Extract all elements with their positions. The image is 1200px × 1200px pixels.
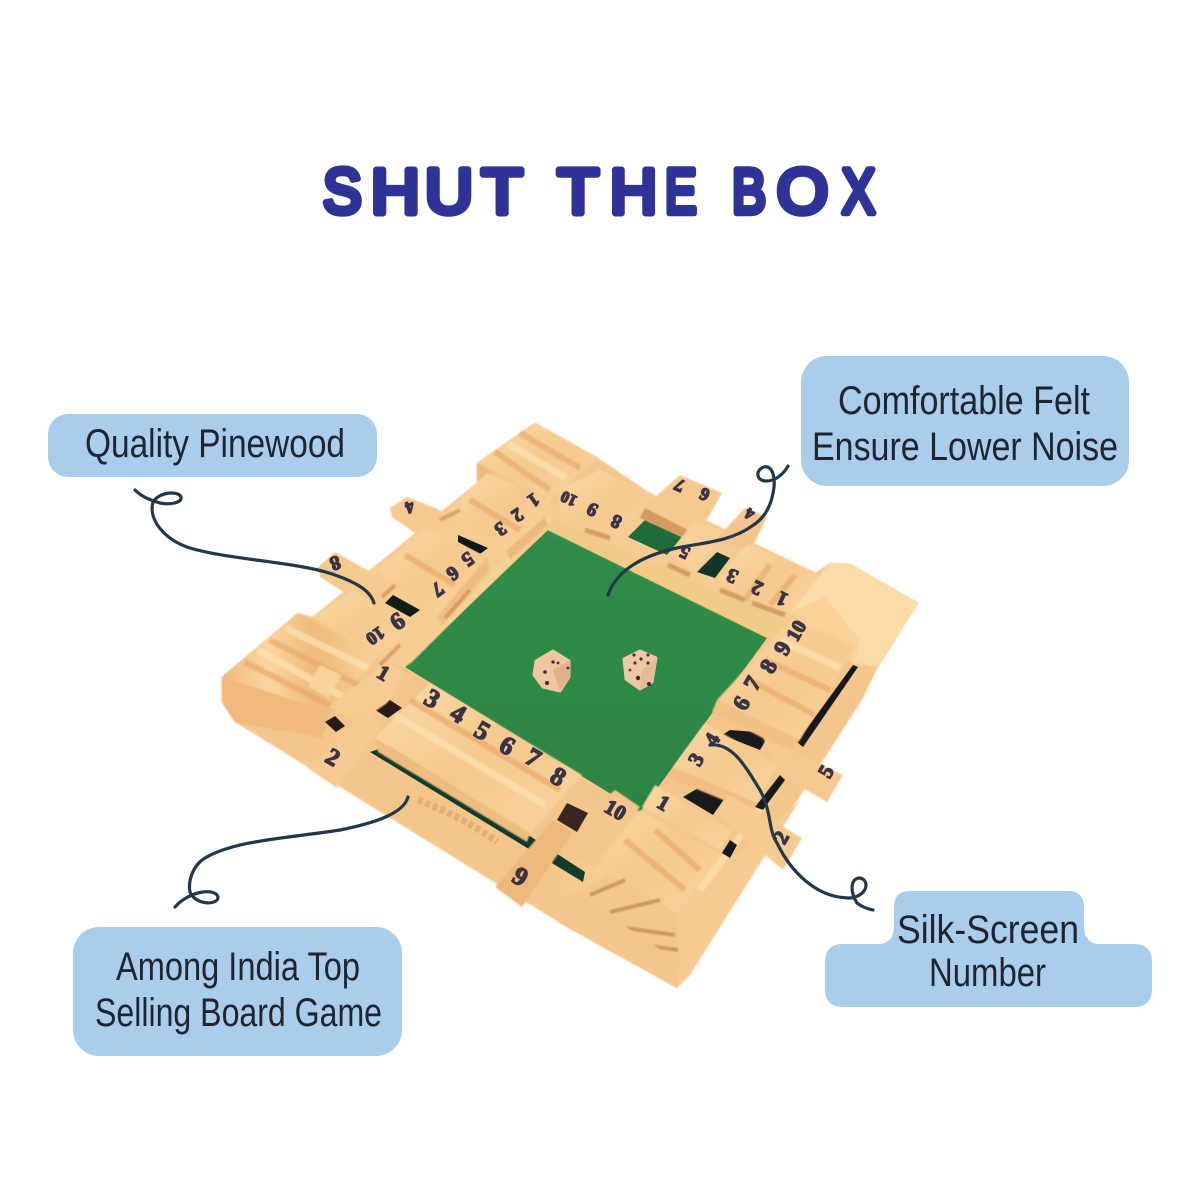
title: O [777,157,828,227]
silk-screen numbers: 2 [507,503,527,526]
silk-screen numbers: 9 [507,861,533,892]
silk-screen numbers: 4 [743,504,757,522]
silk-screen numbers: 1 [773,586,792,611]
title: T [482,157,523,227]
shut the box wooden board [222,423,918,988]
silk-screen numbers: 8 [545,761,571,792]
callout: among india top selling: Selling Board Game [95,991,382,1035]
silk-screen numbers: 7 [520,742,546,773]
title: U [425,157,473,227]
silk-screen numbers: 5 [469,715,495,746]
callout: quality pinewood [48,414,377,477]
silk-screen numbers: 2 [768,827,794,848]
upper rails [313,470,820,667]
bottom rail engraved mark [418,800,497,842]
title: H [371,157,420,227]
silk-screen numbers: 6 [442,561,463,585]
callout: silk-screen number [825,891,1152,1007]
title: S [323,157,362,227]
bottom corner block [560,790,800,988]
silk-screen numbers: 9 [769,637,796,659]
die left [534,651,570,692]
silk-screen numbers: 7 [427,577,448,601]
silk-screen numbers: 4 [445,698,471,729]
slots [325,520,858,882]
silk-screen numbers: 8 [327,551,344,575]
title: X [842,157,875,227]
left corner block [222,613,377,738]
lower-side tiles and tabs [308,662,640,907]
silk-screen numbers: 10 [362,623,389,649]
silk-screen numbers: 7 [739,672,766,694]
silk-screen numbers: 9 [584,497,601,521]
right tiles [712,618,855,752]
silk-screen numbers: 4 [699,729,725,750]
title: H [610,157,657,227]
title: E [665,157,697,227]
callout: silk-screen number: Silk-Screen [897,908,1079,952]
silk-screen numbers: 1 [373,660,394,686]
silk-screen numbers: 3 [683,749,709,770]
callout: comfortable felt: Comfortable Felt [838,379,1090,423]
right corner block [790,563,918,667]
silk-screen numbers: 3 [723,563,742,588]
silk-screen numbers: 3 [419,683,445,714]
silk-screen numbers: 6 [728,692,755,714]
title: B [732,157,766,227]
silk-screen numbers: 10 [558,487,580,509]
top corner block [477,423,598,500]
callout: comfortable felt: Ensure Lower Noise [812,425,1118,469]
silk-screen numbers: 1 [523,488,543,511]
silk-screen numbers: 2 [321,744,344,772]
silk-screen numbers: 8 [608,509,625,533]
silk-screen numbers: 2 [748,575,767,600]
callout: quality pinewood: Quality Pinewood [85,422,345,466]
silk-screen numbers: 8 [755,655,782,677]
connector: silk-screen number [710,745,873,910]
green felt [405,530,767,812]
lower-right tiles and tabs [642,723,843,870]
silk-screen numbers: 6 [494,730,520,761]
title: T [558,157,599,227]
top-left tiles and tabs [313,473,550,665]
dice [534,651,657,692]
silk-screen numbers: 3 [490,517,510,540]
connector: quality pinewood [135,490,374,603]
silk-screen numbers: 9 [385,607,409,635]
silk-screen numbers: 10 [782,617,811,645]
silk-screen numbers: 10 [600,794,631,826]
silk-screen numbers: 5 [457,547,478,571]
silk-screen numbers: 7 [671,474,688,496]
silk-screen numbers [321,474,839,892]
connector: top selling [175,797,408,907]
top-right tiles and tabs [560,470,820,615]
silk-screen numbers: 1 [653,790,674,816]
silk-screen numbers: 6 [696,483,713,505]
die right [624,651,657,690]
title [323,157,875,227]
board base [222,423,918,988]
silk-screen numbers: 5 [676,541,693,563]
silk-screen numbers: 5 [813,761,839,782]
connector: comfortable felt [608,466,788,595]
callout: silk-screen number: Number [929,951,1046,995]
callout: comfortable felt [801,356,1129,486]
callout: among india top selling [73,927,402,1056]
callout: among india top selling: Among India Top [116,945,360,989]
silk-screen numbers: 4 [402,497,417,518]
